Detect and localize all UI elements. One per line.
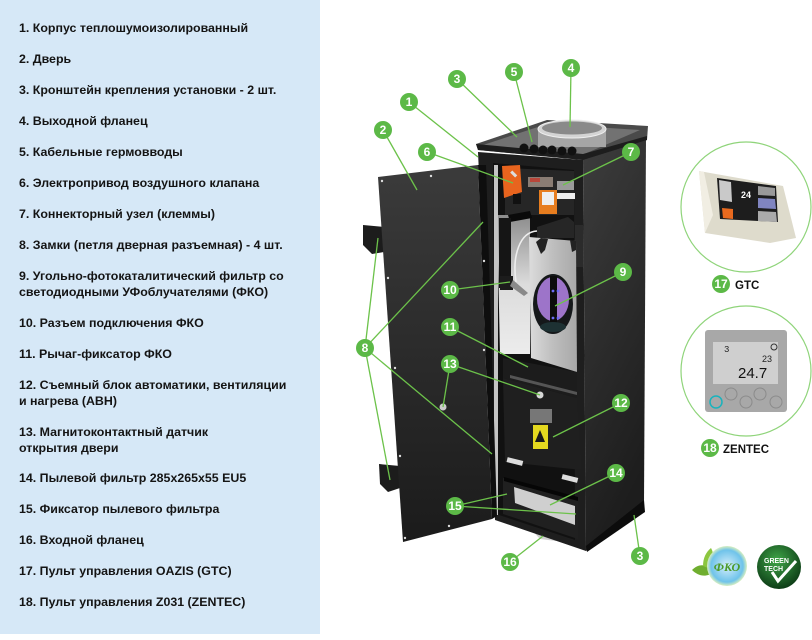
actuator [502, 165, 522, 204]
fixing brackets [508, 211, 532, 222]
logo: Green Tech: GREEN [764, 558, 789, 565]
badge 2 [374, 121, 392, 139]
badge 4: 4 [568, 61, 575, 75]
logo: FKO [692, 546, 747, 586]
badge 7 [622, 143, 640, 161]
label: ZENTEC [701, 439, 769, 457]
badge 5 [505, 63, 523, 81]
legend item 13: открытия двери [19, 441, 118, 455]
cable [515, 231, 537, 282]
badge 3 top [448, 70, 466, 88]
legend item 12: 12. Съемный блок автоматики, вентиляции [19, 378, 286, 392]
badge 14: 14 [609, 466, 623, 480]
legend item 9: 9. Угольно-фотокаталитический фильтр со [19, 269, 284, 283]
callout lines [365, 68, 640, 562]
legend item 4: 4. Выходной фланец [19, 114, 148, 128]
legend item 10: 10. Разъем подключения ФКО [19, 316, 204, 330]
ventilation unit cabinet [476, 120, 648, 552]
legend item 9: светодиодными УФоблучателями (ФКО) [19, 285, 268, 299]
label: GTC [712, 275, 759, 293]
badge 10: 10 [443, 283, 457, 297]
badge 3 bottom: 3 [637, 549, 644, 563]
label: ZENTEC: ZENTEC [723, 444, 769, 456]
badge 11 [441, 318, 459, 336]
badge 15 [446, 497, 464, 515]
bottom lock [379, 464, 400, 492]
badge 7: 7 [628, 145, 635, 159]
base bracket [586, 500, 645, 552]
GTC screen: 24 [741, 190, 751, 200]
door leaf [378, 165, 492, 542]
badge 6 [418, 143, 436, 161]
top flange [538, 120, 606, 147]
legend item 18: 18. Пульт управления Z031 (ZENTEC) [19, 595, 245, 609]
GTC controller inset [681, 142, 811, 272]
panel: parts legend [0, 0, 320, 634]
legend item 11: 11. Рычаг-фиксатор ФКО [19, 347, 172, 361]
badge 13: 13 [443, 357, 457, 371]
badge 5: 5 [511, 65, 518, 79]
ZENTEC device body [705, 330, 787, 412]
legend item 9 [19, 269, 284, 299]
legend item 12 [19, 378, 286, 408]
dust filter [503, 477, 578, 539]
legend item 2: 2. Дверь [19, 52, 72, 66]
GTC device body [699, 171, 796, 243]
legend item 3: 3. Кронштейн крепления установки - 2 шт. [19, 83, 276, 97]
door [363, 165, 497, 542]
badge 1: 1 [406, 95, 413, 109]
logo: Green Tech: TECH [764, 566, 783, 573]
logo: Green Tech [757, 545, 801, 589]
badge 9 [614, 263, 632, 281]
light side wall [497, 215, 530, 354]
AVN automation block [503, 358, 582, 483]
legend item 13: 13. Магнитоконтактный датчик [19, 425, 209, 439]
carbon filter [529, 237, 577, 372]
filter window [533, 274, 573, 334]
badge 8 [356, 339, 374, 357]
legend item 17: 17. Пульт управления OAZIS (GTC) [19, 564, 232, 578]
interior back [493, 163, 575, 540]
ZENTEC LCD: 3 [724, 345, 729, 355]
connector labels [528, 177, 575, 214]
legend item 8: 8. Замки (петля дверная разъемная) - 4 шт. [19, 238, 283, 252]
legend item 12: и нагрева (АВН) [19, 394, 117, 408]
top plate [476, 120, 648, 160]
door screws [381, 175, 485, 539]
badge 14 [607, 464, 625, 482]
legend item 16: 16. Входной фланец [19, 533, 144, 547]
legend item 14: 14. Пылевой фильтр 285х265х55 EU5 [19, 471, 246, 485]
badge 11: 11 [444, 320, 457, 334]
badge 3 top: 3 [454, 72, 461, 86]
badge 12: 12 [614, 396, 628, 410]
badge 4 [562, 59, 580, 77]
badge 10 [441, 281, 459, 299]
cabinet right side [583, 138, 646, 551]
badge 13 [441, 355, 459, 373]
badge 8: 8 [362, 341, 369, 355]
legend item 15: 15. Фиксатор пылевого фильтра [19, 502, 220, 516]
bottom flange [530, 528, 560, 541]
ZENTEC buttons [710, 388, 782, 408]
badge 1 [400, 93, 418, 111]
ZENTEC LCD: 24.7 [738, 365, 767, 382]
connector [500, 276, 528, 296]
door sensor [440, 404, 446, 410]
left vertical rail [499, 218, 511, 288]
badge 16: 16 [503, 555, 517, 569]
badge 15: 15 [448, 499, 462, 513]
logo: FKO: ФКО [714, 560, 741, 574]
badge 6: 6 [424, 145, 431, 159]
cabinet front frame [478, 152, 586, 551]
legend item 1: 1. Корпус теплошумоизолированный [19, 21, 248, 35]
legend item 13 [19, 425, 209, 455]
label: GTC: GTC [735, 280, 759, 292]
ZENTEC LCD: 23 [762, 354, 772, 364]
badge 9: 9 [620, 265, 627, 279]
interior upper panel [505, 168, 574, 215]
top lock [363, 225, 384, 254]
badge 3 bottom [631, 547, 649, 565]
legend item 5: 5. Кабельные гермовводы [19, 145, 183, 159]
legend item 7: 7. Коннекторный узел (клеммы) [19, 207, 215, 221]
legend item 6: 6. Электропривод воздушного клапана [19, 176, 259, 190]
badge 16 [501, 553, 519, 571]
badge 2: 2 [380, 123, 387, 137]
number badges [356, 59, 649, 571]
cable glands [520, 144, 576, 156]
label: GTC: 17 [714, 277, 728, 291]
label: ZENTEC: 18 [703, 441, 717, 455]
badge 12 [612, 394, 630, 412]
ZENTEC LCD [713, 342, 778, 384]
ZENTEC controller inset [681, 306, 811, 436]
